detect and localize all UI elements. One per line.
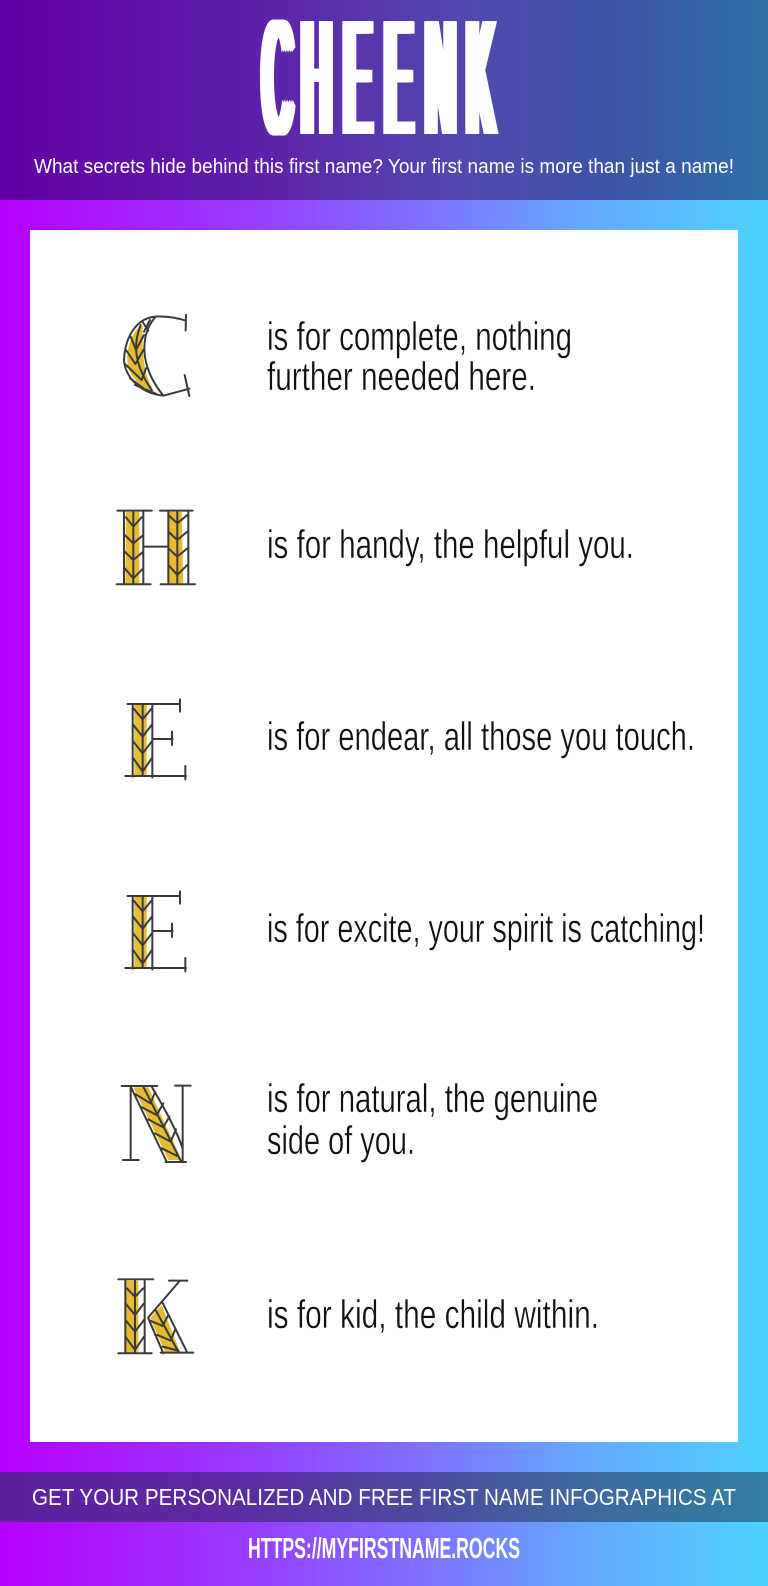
icon: second letter E with wheat [125, 891, 186, 971]
icon: letter H with wheat [117, 511, 195, 584]
text: letter N: side of you. [267, 1119, 415, 1163]
text: letter K: is for kid, the child within. [267, 1293, 599, 1337]
footer url: HTTPS://MYFIRSTNAME.ROCKS [248, 1533, 520, 1565]
text: letter C: is for complete, nothing [267, 315, 572, 359]
text: letter C [267, 315, 572, 399]
text: letter H: is for handy, the helpful you. [267, 523, 634, 567]
icon: letter C with wheat [124, 315, 189, 396]
icon: letter N with wheat [122, 1086, 191, 1162]
white content panel [30, 230, 738, 1442]
footer band [0, 1472, 768, 1522]
text: letter N: is for natural, the genuine [267, 1077, 598, 1121]
icon: letter K with wheat [118, 1279, 193, 1353]
icon: letter E with wheat [125, 699, 186, 779]
text: letter N [267, 1077, 598, 1163]
subtitle: What secrets hide behind this first name? Your first name is more than just a name! [34, 156, 734, 178]
text: letter C: further needed here. [267, 355, 536, 399]
title [260, 0, 499, 169]
header band [0, 0, 768, 200]
